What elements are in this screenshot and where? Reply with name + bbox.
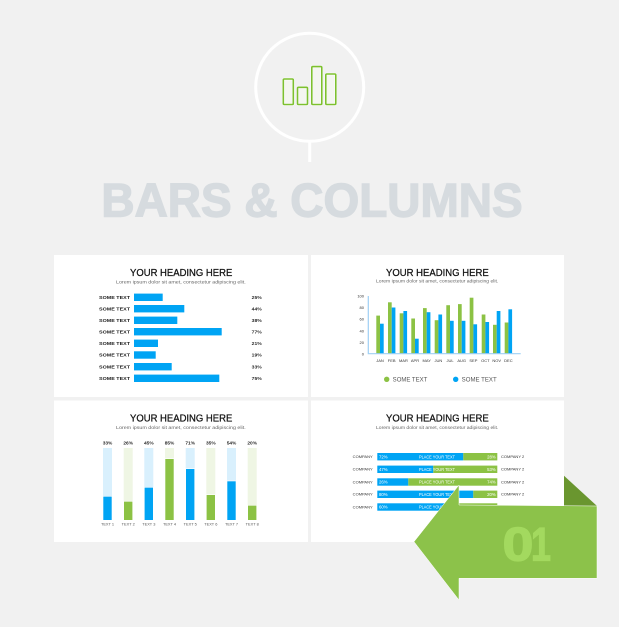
percent values: 33% [252, 364, 262, 370]
column chart: 100 [357, 294, 365, 299]
ribbon fold [564, 476, 597, 506]
right company labels: COMPANY 2 [501, 492, 525, 497]
heading: YOUR HEADING HERE [386, 268, 489, 279]
column labels: TEXT 6 [204, 522, 217, 527]
legend: SOME TEXT [393, 377, 428, 383]
bar values: 40% [487, 505, 496, 510]
right company labels: COMPANY 2 [501, 467, 525, 472]
panel: clustered columns [311, 255, 564, 397]
column labels: TEXT 5 [184, 522, 197, 527]
subheading: Lorem ipsum dolor sit amet, consectetur adipiscing elit. [116, 280, 246, 286]
column chart: 20 [360, 340, 365, 345]
left company labels: COMPANY [353, 479, 373, 484]
column chart: 60 [360, 317, 365, 322]
percent values: 75% [252, 376, 262, 382]
percent values: 19% [252, 353, 262, 359]
row labels: SOME TEXT [99, 364, 130, 370]
column chart: JUN [435, 358, 442, 363]
right company labels [501, 454, 525, 509]
column chart: MAY [423, 358, 431, 363]
percent labels: 35% [206, 441, 216, 447]
percent labels: 33% [103, 441, 113, 447]
percent labels: 54% [227, 441, 237, 447]
percent labels: 20% [247, 441, 258, 447]
row labels: SOME TEXT [99, 329, 130, 335]
row labels: SOME TEXT [99, 318, 130, 324]
legend [384, 377, 497, 383]
column chart: JUL [446, 358, 454, 363]
row labels: SOME TEXT [99, 353, 130, 359]
column labels: TEXT 4 [163, 522, 177, 527]
percent values: 25% [252, 295, 262, 301]
percent values: 38% [252, 318, 262, 324]
column chart: 0 [362, 351, 365, 356]
bar values: PLACE YOUR TEXT [419, 467, 455, 472]
bar values: 47% [379, 467, 388, 472]
bar values: 26% [379, 480, 388, 485]
row labels: SOME TEXT [99, 306, 130, 312]
panel: progress columns [54, 400, 308, 542]
percent values [252, 295, 262, 382]
legend: SOME TEXT [462, 377, 497, 383]
left company labels: COMPANY [353, 454, 373, 459]
right company labels: COMPANY 2 [501, 454, 525, 459]
column chart: FEB [388, 358, 396, 363]
percent labels: 71% [185, 441, 196, 447]
percent labels: 26% [123, 441, 134, 447]
left company labels: COMPANY [353, 467, 373, 472]
subheading: Lorem ipsum dolor sit amet, consectetur adipiscing elit. [376, 279, 498, 285]
number: 0 [502, 517, 534, 570]
column fills [103, 459, 257, 520]
column labels: TEXT 8 [246, 522, 259, 527]
column chart: MAR [399, 358, 408, 363]
percent values: 77% [252, 329, 262, 335]
column labels: TEXT 3 [142, 522, 155, 527]
column chart: NOV [492, 358, 501, 363]
left company labels [353, 454, 373, 509]
percent labels [103, 441, 258, 447]
arrow ribbon with number [414, 476, 597, 600]
bar values: 28% [487, 454, 496, 459]
bar values: PLACE YOUR TEXT [419, 492, 455, 497]
bar values: 72% [379, 454, 388, 459]
bar values: PLACE YOUR TEXT [419, 505, 455, 510]
row labels [99, 295, 130, 382]
bar values: 53% [487, 467, 496, 472]
percent values: 44% [252, 306, 262, 312]
row labels: SOME TEXT [99, 376, 130, 382]
arrow [414, 485, 597, 600]
right company labels: COMPANY 2 [501, 479, 525, 484]
heading: YOUR HEADING HERE [130, 268, 233, 279]
bar values: 20% [487, 492, 496, 497]
icon: bar chart in circle [256, 33, 364, 162]
column chart: 40 [360, 328, 365, 333]
bar values: 60% [379, 505, 388, 510]
row labels: SOME TEXT [99, 341, 130, 347]
bar values [379, 454, 496, 510]
right company labels: COMPANY 2 [501, 504, 525, 509]
column labels [101, 522, 259, 527]
bar chart [134, 294, 222, 382]
percent values: 21% [252, 341, 262, 347]
column labels: TEXT 2 [122, 522, 135, 527]
heading: YOUR HEADING HERE [130, 414, 233, 424]
column tracks [103, 448, 257, 520]
percent labels: 45% [144, 441, 154, 447]
number: 1 [531, 517, 551, 570]
percent labels: 85% [165, 441, 175, 447]
stacked bars [377, 453, 497, 511]
left company labels: COMPANY [353, 504, 373, 509]
title: BARS & COLUMNS [101, 174, 523, 227]
heading: YOUR HEADING HERE [386, 414, 489, 424]
column chart [357, 294, 521, 363]
bar values: 80% [379, 492, 388, 497]
column chart: JAN [376, 358, 384, 363]
column chart: APR [411, 358, 419, 363]
bar values: PLACE YOUR TEXT [419, 454, 455, 459]
left company labels: COMPANY [353, 492, 373, 497]
panel: company comparison [311, 400, 564, 542]
column chart: OCT [481, 358, 490, 363]
column chart: SEP [469, 358, 478, 363]
bar values: 74% [487, 480, 496, 485]
subheading: Lorem ipsum dolor sit amet, consectetur adipiscing elit. [376, 425, 498, 431]
bar values: PLACE YOUR TEXT [419, 480, 455, 485]
subheading: Lorem ipsum dolor sit amet, consectetur adipiscing elit. [116, 425, 246, 431]
column chart: AUG [457, 358, 466, 363]
column labels: TEXT 1 [101, 522, 114, 527]
column chart: 80 [360, 305, 365, 310]
column labels: TEXT 7 [225, 522, 238, 527]
column chart: DEC [504, 358, 513, 363]
row labels: SOME TEXT [99, 295, 130, 301]
panel: horizontal bars [54, 255, 308, 397]
